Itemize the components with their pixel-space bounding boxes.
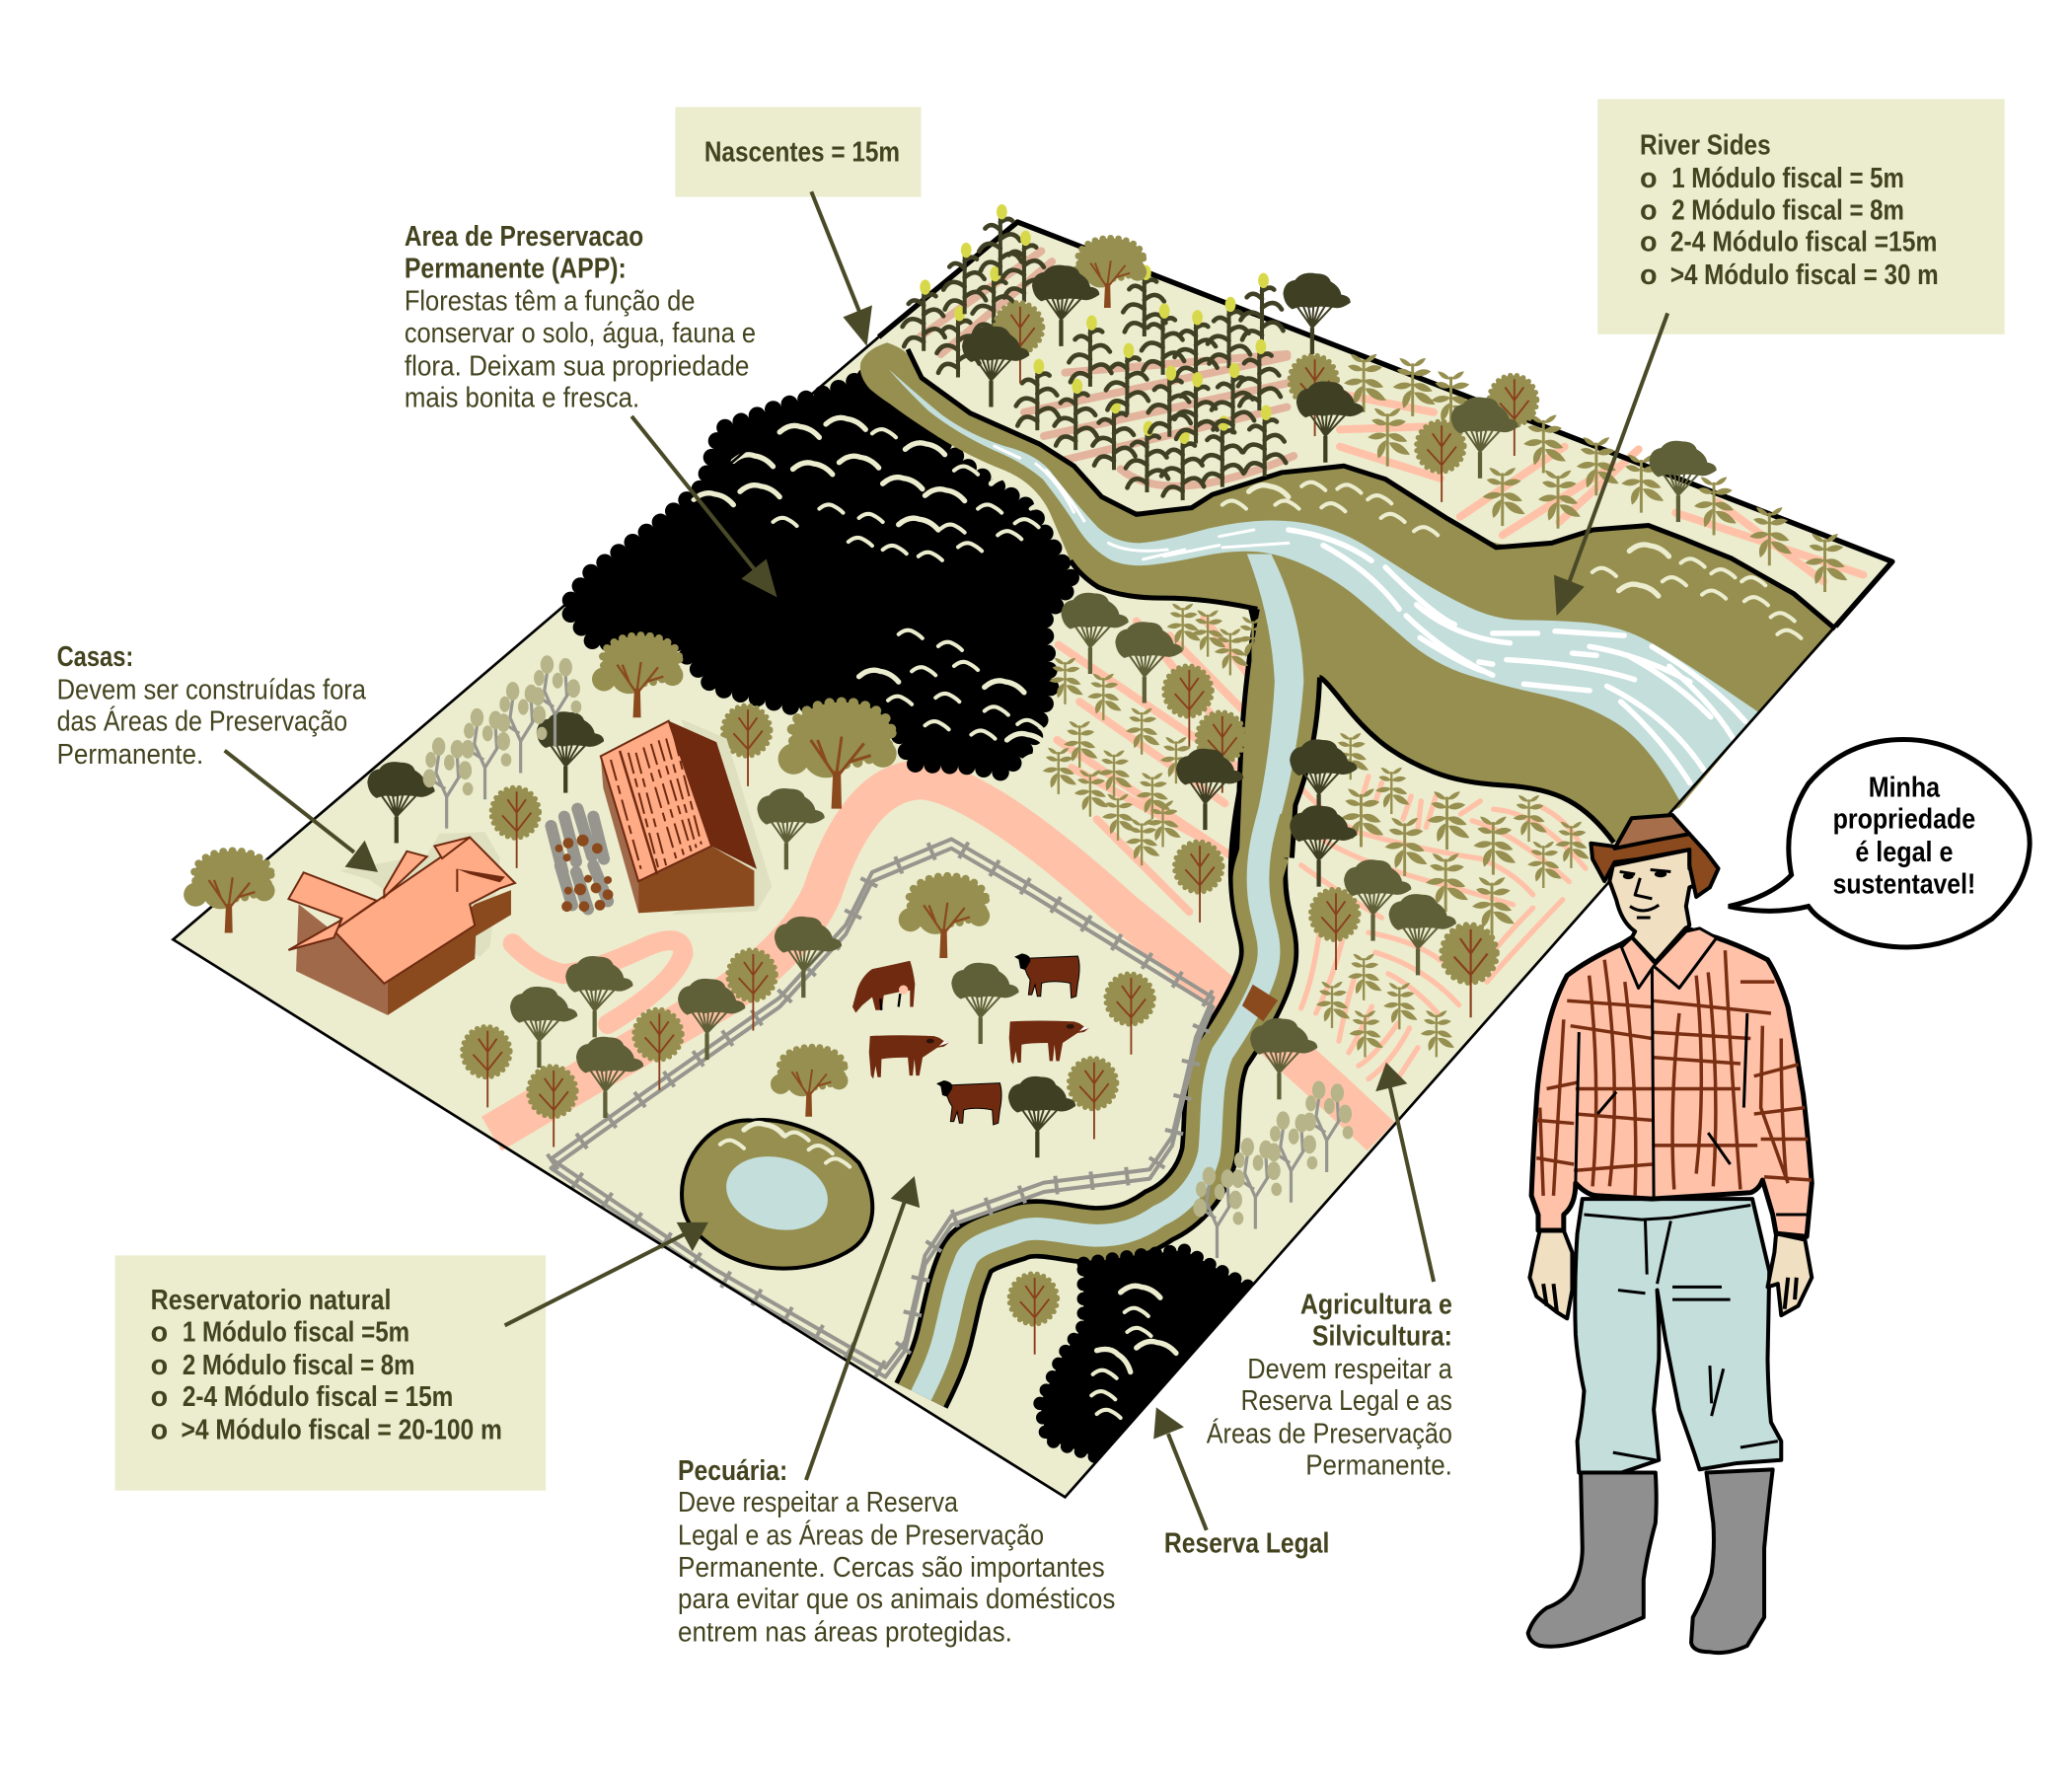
stream water (921, 809, 1270, 1395)
bridge (1242, 985, 1278, 1021)
text: Agricultura e Silvicultura: Devem respeitar a (1247, 1354, 1452, 1385)
jeans (1575, 1199, 1781, 1473)
stream black banks (921, 549, 1286, 1395)
natural reservoir (682, 1120, 872, 1269)
text: Casas: das Áreas de Preservação (57, 705, 347, 738)
text: Agricultura e Silvicultura (1207, 1289, 1452, 1482)
panel: Reservatorio natural: >4 Módulo fiscal = 20-100 m (181, 1414, 502, 1445)
main road (491, 779, 1381, 1137)
main river (888, 369, 1759, 801)
hands (1529, 1230, 1812, 1318)
arrow: APP (631, 416, 777, 597)
hat (1591, 815, 1719, 897)
arrow: Reservatorio (505, 1222, 708, 1325)
collar and seams (1621, 928, 1717, 988)
panel: River Sides: 2 Módulo fiscal = 8m (1671, 194, 1904, 226)
text: Agricultura e Silvicultura: Reserva Legal e as (1241, 1385, 1452, 1417)
river white streaks lower (1289, 530, 1745, 783)
stream olive band (921, 852, 1269, 1395)
panel: Reservatorio natural (115, 1255, 546, 1491)
text: Casas: Devem ser construídas fora (57, 674, 366, 705)
panel: River Sides: >4 Módulo fiscal = 30 m (1670, 259, 1939, 291)
forest highlights (694, 417, 1055, 764)
text: Pecuária: entrem nas áreas protegidas. (678, 1616, 1012, 1648)
plaid pattern (1536, 950, 1812, 1196)
panel: River Sides: o (1640, 226, 1658, 258)
text: Area de Preservacao Permanente: Permanente (APP): (405, 253, 627, 284)
timber logs (551, 809, 613, 912)
panel: Reservatorio natural: Reservatorio natural (151, 1285, 391, 1316)
panel: Reservatorio natural: 2 Módulo fiscal = 8m (183, 1350, 415, 1381)
panel: Reservatorio natural: o (151, 1414, 168, 1445)
speech balloon: propriedade (1833, 804, 1975, 836)
text: Agricultura e Silvicultura: Agricultura e (1300, 1289, 1452, 1320)
panel: Reservatorio natural: o (151, 1381, 168, 1413)
bank lines (908, 349, 1835, 629)
speech balloon: Minha (1869, 773, 1941, 804)
riparian olive band (860, 342, 1835, 858)
umbrella trees (367, 265, 1717, 1157)
panel: Reservatorio natural: 2-4 Módulo fiscal = 15m (183, 1381, 453, 1413)
cornfield (903, 204, 1286, 500)
arrow: Agricultura (1375, 1063, 1434, 1282)
pasture fence (551, 839, 1213, 1377)
panel: River Sides: o (1640, 163, 1658, 194)
text: Area de Preservacao Permanente: mais bonita e fresca. (405, 383, 639, 414)
eucalyptus trees (423, 655, 1353, 1258)
soy crops (1043, 354, 1847, 1057)
forest: Reserva Legal (1040, 1250, 1269, 1467)
panel: Reservatorio natural: o (151, 1316, 168, 1348)
text: Casas: Casas: (57, 641, 133, 673)
panel: Reservatorio natural: o (151, 1350, 168, 1381)
text: Agricultura e Silvicultura: Permanente. (1305, 1450, 1452, 1482)
text: Reserva Legal: Reserva Legal (1164, 1528, 1329, 1560)
broad trees (184, 238, 1147, 1117)
house driveway (513, 940, 683, 1024)
olive hill highlights (1222, 482, 1801, 638)
oval trees (463, 303, 1537, 1355)
panel: River Sides: o (1640, 194, 1658, 226)
field outline (173, 222, 1892, 1497)
forest: APP (565, 377, 1073, 773)
upper stream widening (1236, 609, 1319, 858)
building: barn (601, 719, 772, 915)
text: Pecuária: Pecuária: (678, 1455, 787, 1487)
speech balloon: sustentavel! (1833, 868, 1975, 900)
neck and head (1609, 850, 1698, 966)
panel: Nascentes (675, 107, 921, 197)
shirt (1531, 928, 1812, 1236)
text: Area de Preservacao Permanente: Florestas têm a função de (405, 286, 695, 318)
text: Area de Preservacao Permanente: flora. Deixam sua propriedade (405, 350, 749, 382)
panel: River Sides: River Sides (1640, 130, 1771, 162)
upper stream water (1247, 555, 1303, 814)
river white streaks upper (995, 446, 1289, 559)
boots (1528, 1469, 1773, 1653)
panel: River Sides: 1 Módulo fiscal = 5m (1671, 163, 1904, 194)
text: Pecuária: Deve respeitar a Reserva (678, 1487, 958, 1518)
speech balloon (1729, 740, 2030, 947)
arrow: Nascentes (811, 191, 872, 346)
figure: farmer (1528, 815, 1812, 1653)
speech balloon: é legal e (1855, 837, 1953, 868)
text: Agricultura e Silvicultura: Áreas de Preservação (1207, 1418, 1452, 1450)
panel: Reservatorio natural: 1 Módulo fiscal =5m (183, 1316, 409, 1348)
field base (173, 222, 1892, 1497)
text: Pecuária: para evitar que os animais domésticos (678, 1584, 1115, 1615)
text: Area de Preservacao Permanente: conservar o solo, água, fauna e (405, 318, 756, 349)
text: Area de Preservacao Permanente (405, 221, 756, 414)
panel: River Sides: o (1640, 259, 1658, 291)
arrow: Casas (225, 751, 378, 872)
arrow: Pecuária (806, 1176, 920, 1480)
cattle (852, 953, 1089, 1125)
text: Casas (57, 641, 366, 771)
text: Casas: Permanente. (57, 739, 203, 771)
face (1620, 870, 1670, 918)
text: Pecuária: Legal e as Áreas de Preservação (678, 1519, 1044, 1552)
crop stripes (920, 251, 1863, 1079)
building: farmhouse (288, 832, 515, 1015)
text: Pecuária (678, 1455, 1115, 1648)
text: Pecuária: Permanente. Cercas são importantes (678, 1552, 1105, 1584)
panel: River Sides (1597, 99, 2005, 334)
arrow: River Sides (1554, 313, 1667, 616)
panel: River Sides: 2-4 Módulo fiscal =15m (1670, 226, 1937, 258)
text: Area de Preservacao Permanente: Area de Preservacao (405, 221, 643, 253)
panel: Nascentes: Nascentes = 15m (704, 136, 900, 168)
text: Agricultura e Silvicultura: Silvicultura: (1312, 1320, 1452, 1352)
arrow: Reserva Legal (1153, 1407, 1207, 1530)
